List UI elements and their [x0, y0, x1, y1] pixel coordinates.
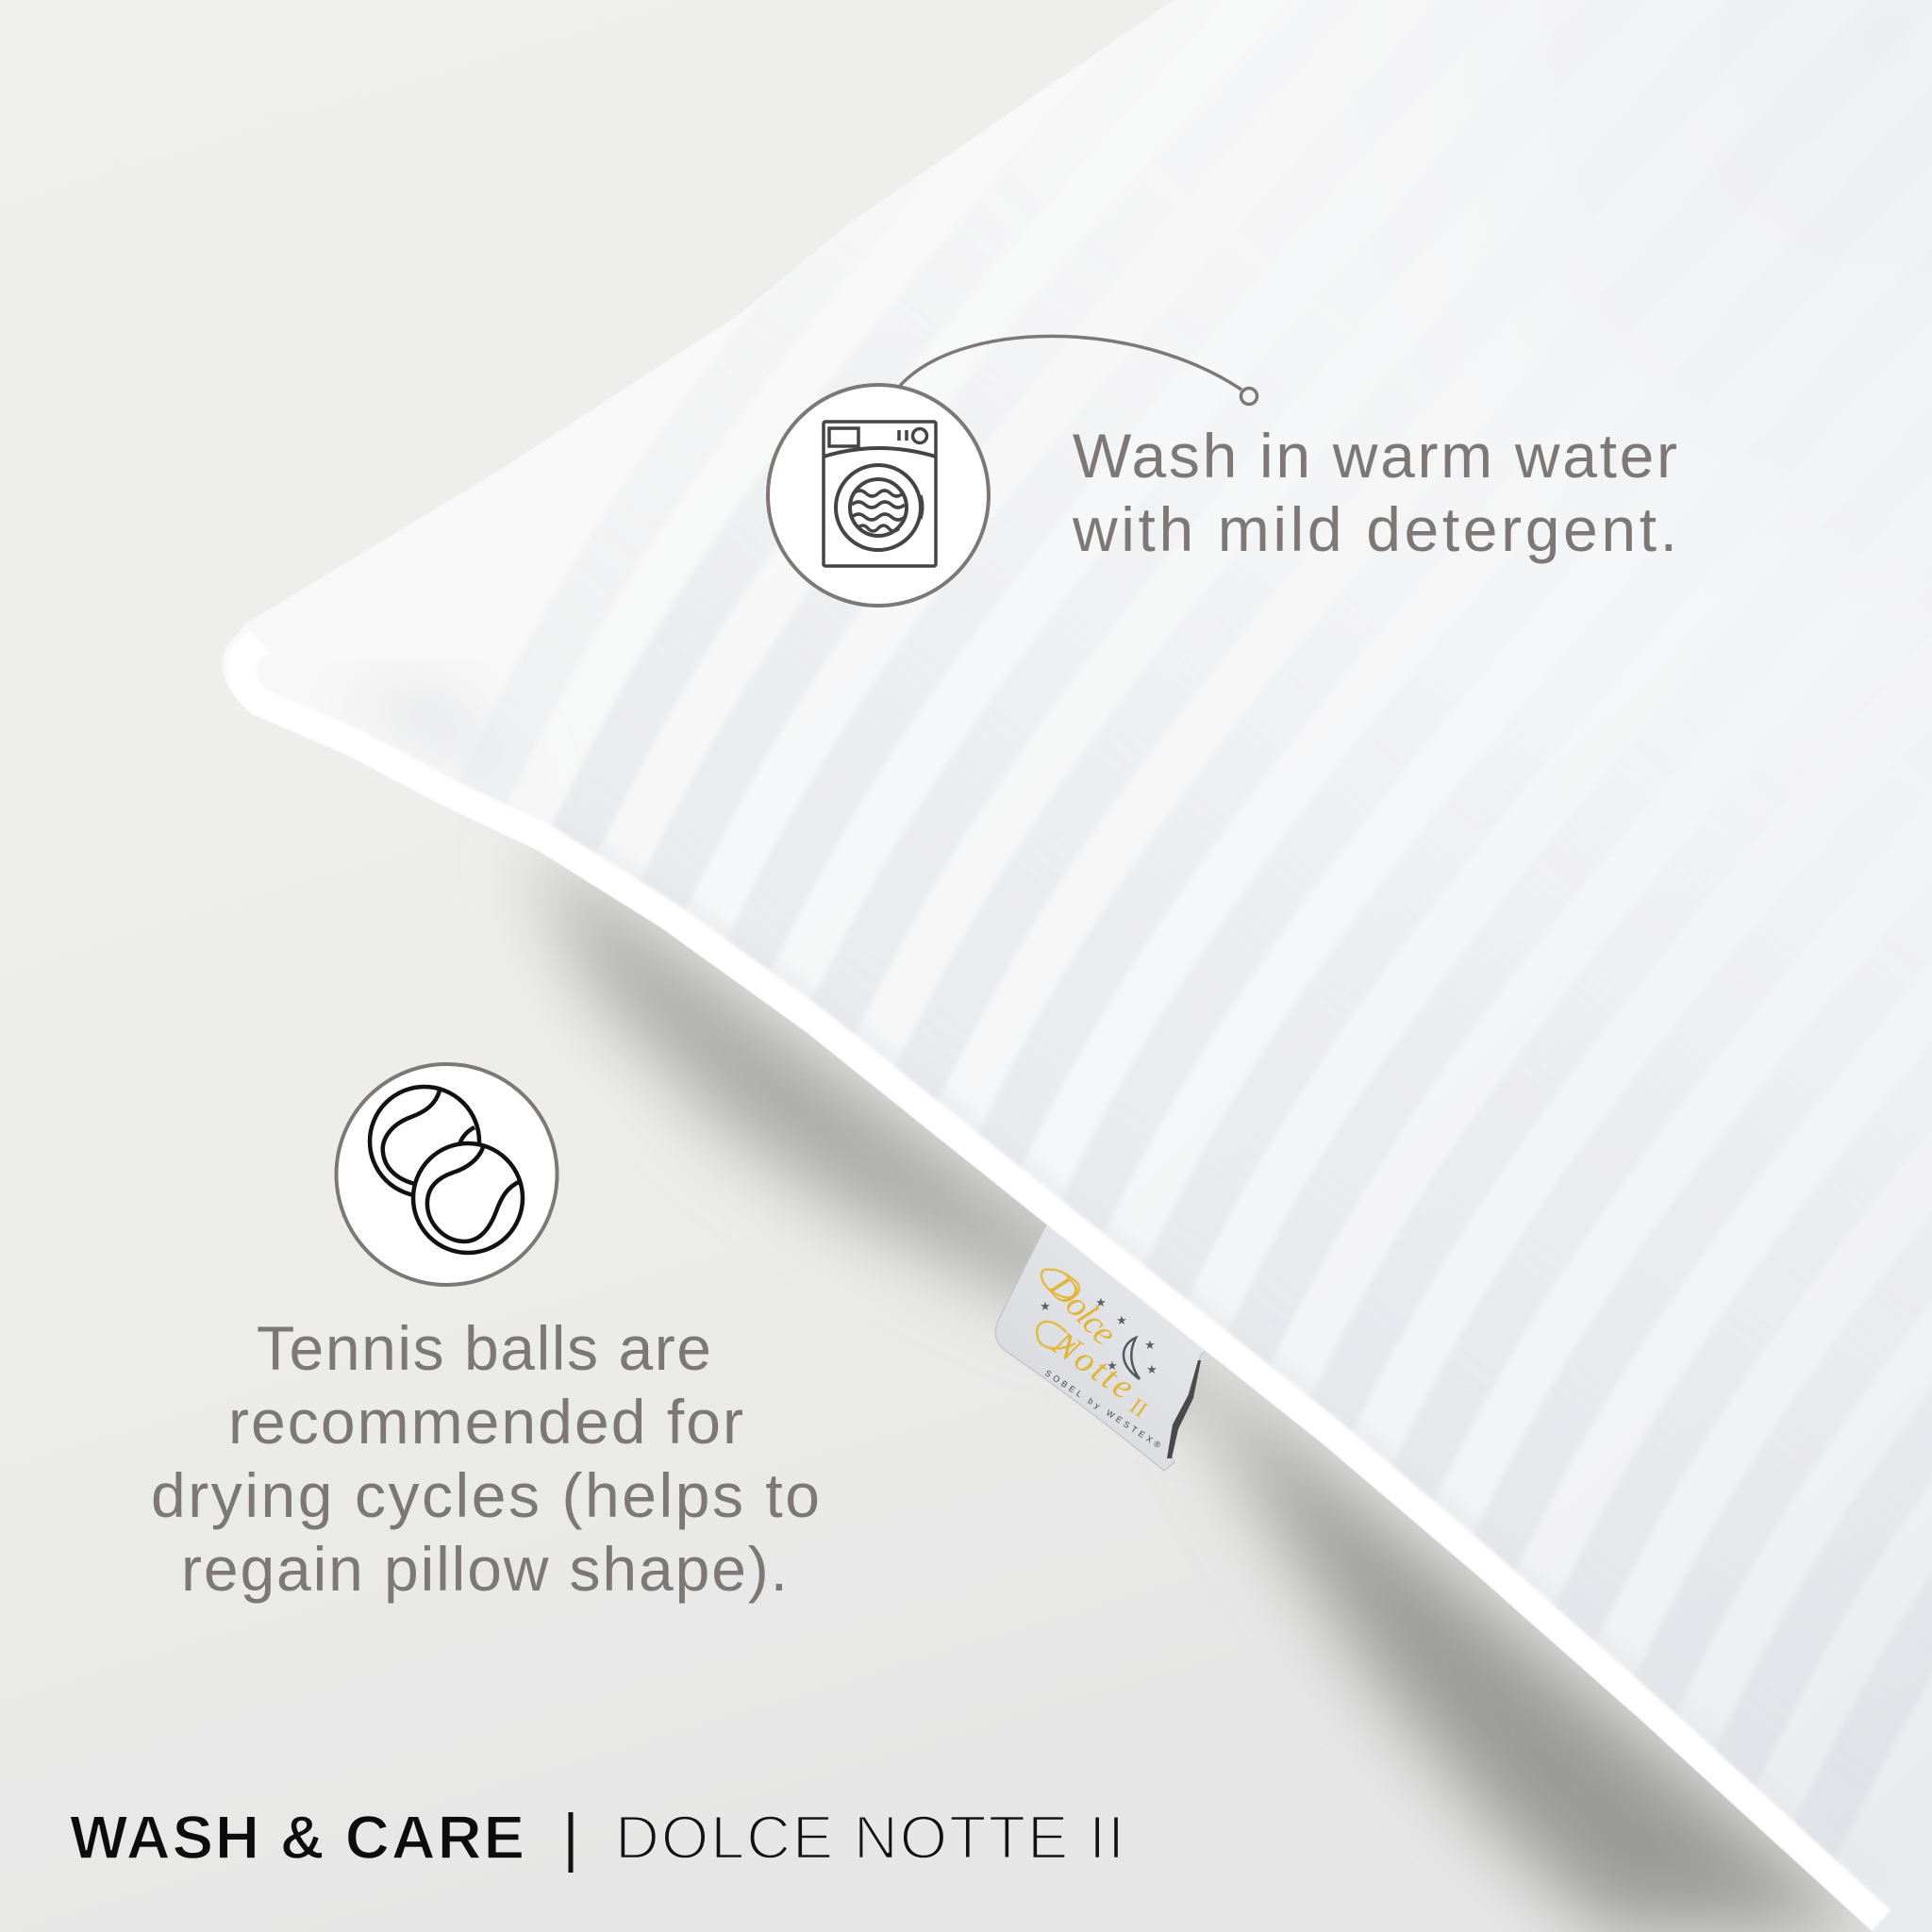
pillow damask stripes — [555, 472, 1932, 1855]
connector end dot — [1241, 389, 1257, 404]
wash instruction text: Wash in warm water — [1073, 421, 1677, 491]
tennis instruction text — [151, 1313, 820, 1604]
tag moon — [1124, 1338, 1140, 1379]
tennis instruction text: drying cycles (helps to — [151, 1460, 820, 1530]
callout: tennis balls — [151, 1064, 820, 1604]
tennis icon badge — [336, 1064, 557, 1285]
pillow tag — [995, 1208, 1217, 1471]
tennis instruction text: regain pillow shape). — [181, 1534, 788, 1604]
tag stars: ★ — [1040, 1300, 1051, 1314]
inner seam shading — [555, 823, 1877, 1877]
tennis instruction text: Tennis balls are — [257, 1313, 711, 1383]
tag logo text: II — [1125, 1394, 1152, 1423]
icon: washing machine — [824, 422, 936, 566]
wash icon badge — [768, 385, 989, 606]
pillow piping — [242, 641, 1881, 1921]
connector arc — [899, 336, 1241, 390]
wash instruction text — [1072, 421, 1677, 564]
tag maker text: SOBEL by WESTEX® — [1043, 1368, 1162, 1450]
tag fold shadow — [1167, 1360, 1201, 1458]
tag logo text: Dolce — [1041, 1267, 1124, 1353]
tag logo swashes — [1037, 1269, 1079, 1348]
footer divider — [568, 1812, 574, 1873]
tennis instruction text: recommended for — [228, 1387, 743, 1457]
pillow cast shadow — [528, 840, 1873, 1932]
icon: tennis balls — [370, 1087, 523, 1253]
tag stars: ★ — [1107, 1359, 1118, 1374]
tag stars: ★ — [1144, 1339, 1156, 1353]
tag stars — [1040, 1296, 1158, 1377]
footer title — [70, 1803, 1124, 1873]
wash instruction text: with mild detergent. — [1072, 494, 1677, 564]
footer title: DOLCE NOTTE II — [615, 1803, 1124, 1872]
footer title: WASH & CARE — [70, 1803, 525, 1872]
tag stars: ★ — [1146, 1363, 1158, 1377]
tag logo text: Notte — [1044, 1323, 1141, 1407]
tag stars: ★ — [1095, 1296, 1107, 1310]
tag logo text — [1041, 1267, 1152, 1423]
soft shading near corner — [392, 693, 475, 753]
callout: wash — [768, 336, 1677, 606]
tag stars: ★ — [1116, 1314, 1127, 1328]
